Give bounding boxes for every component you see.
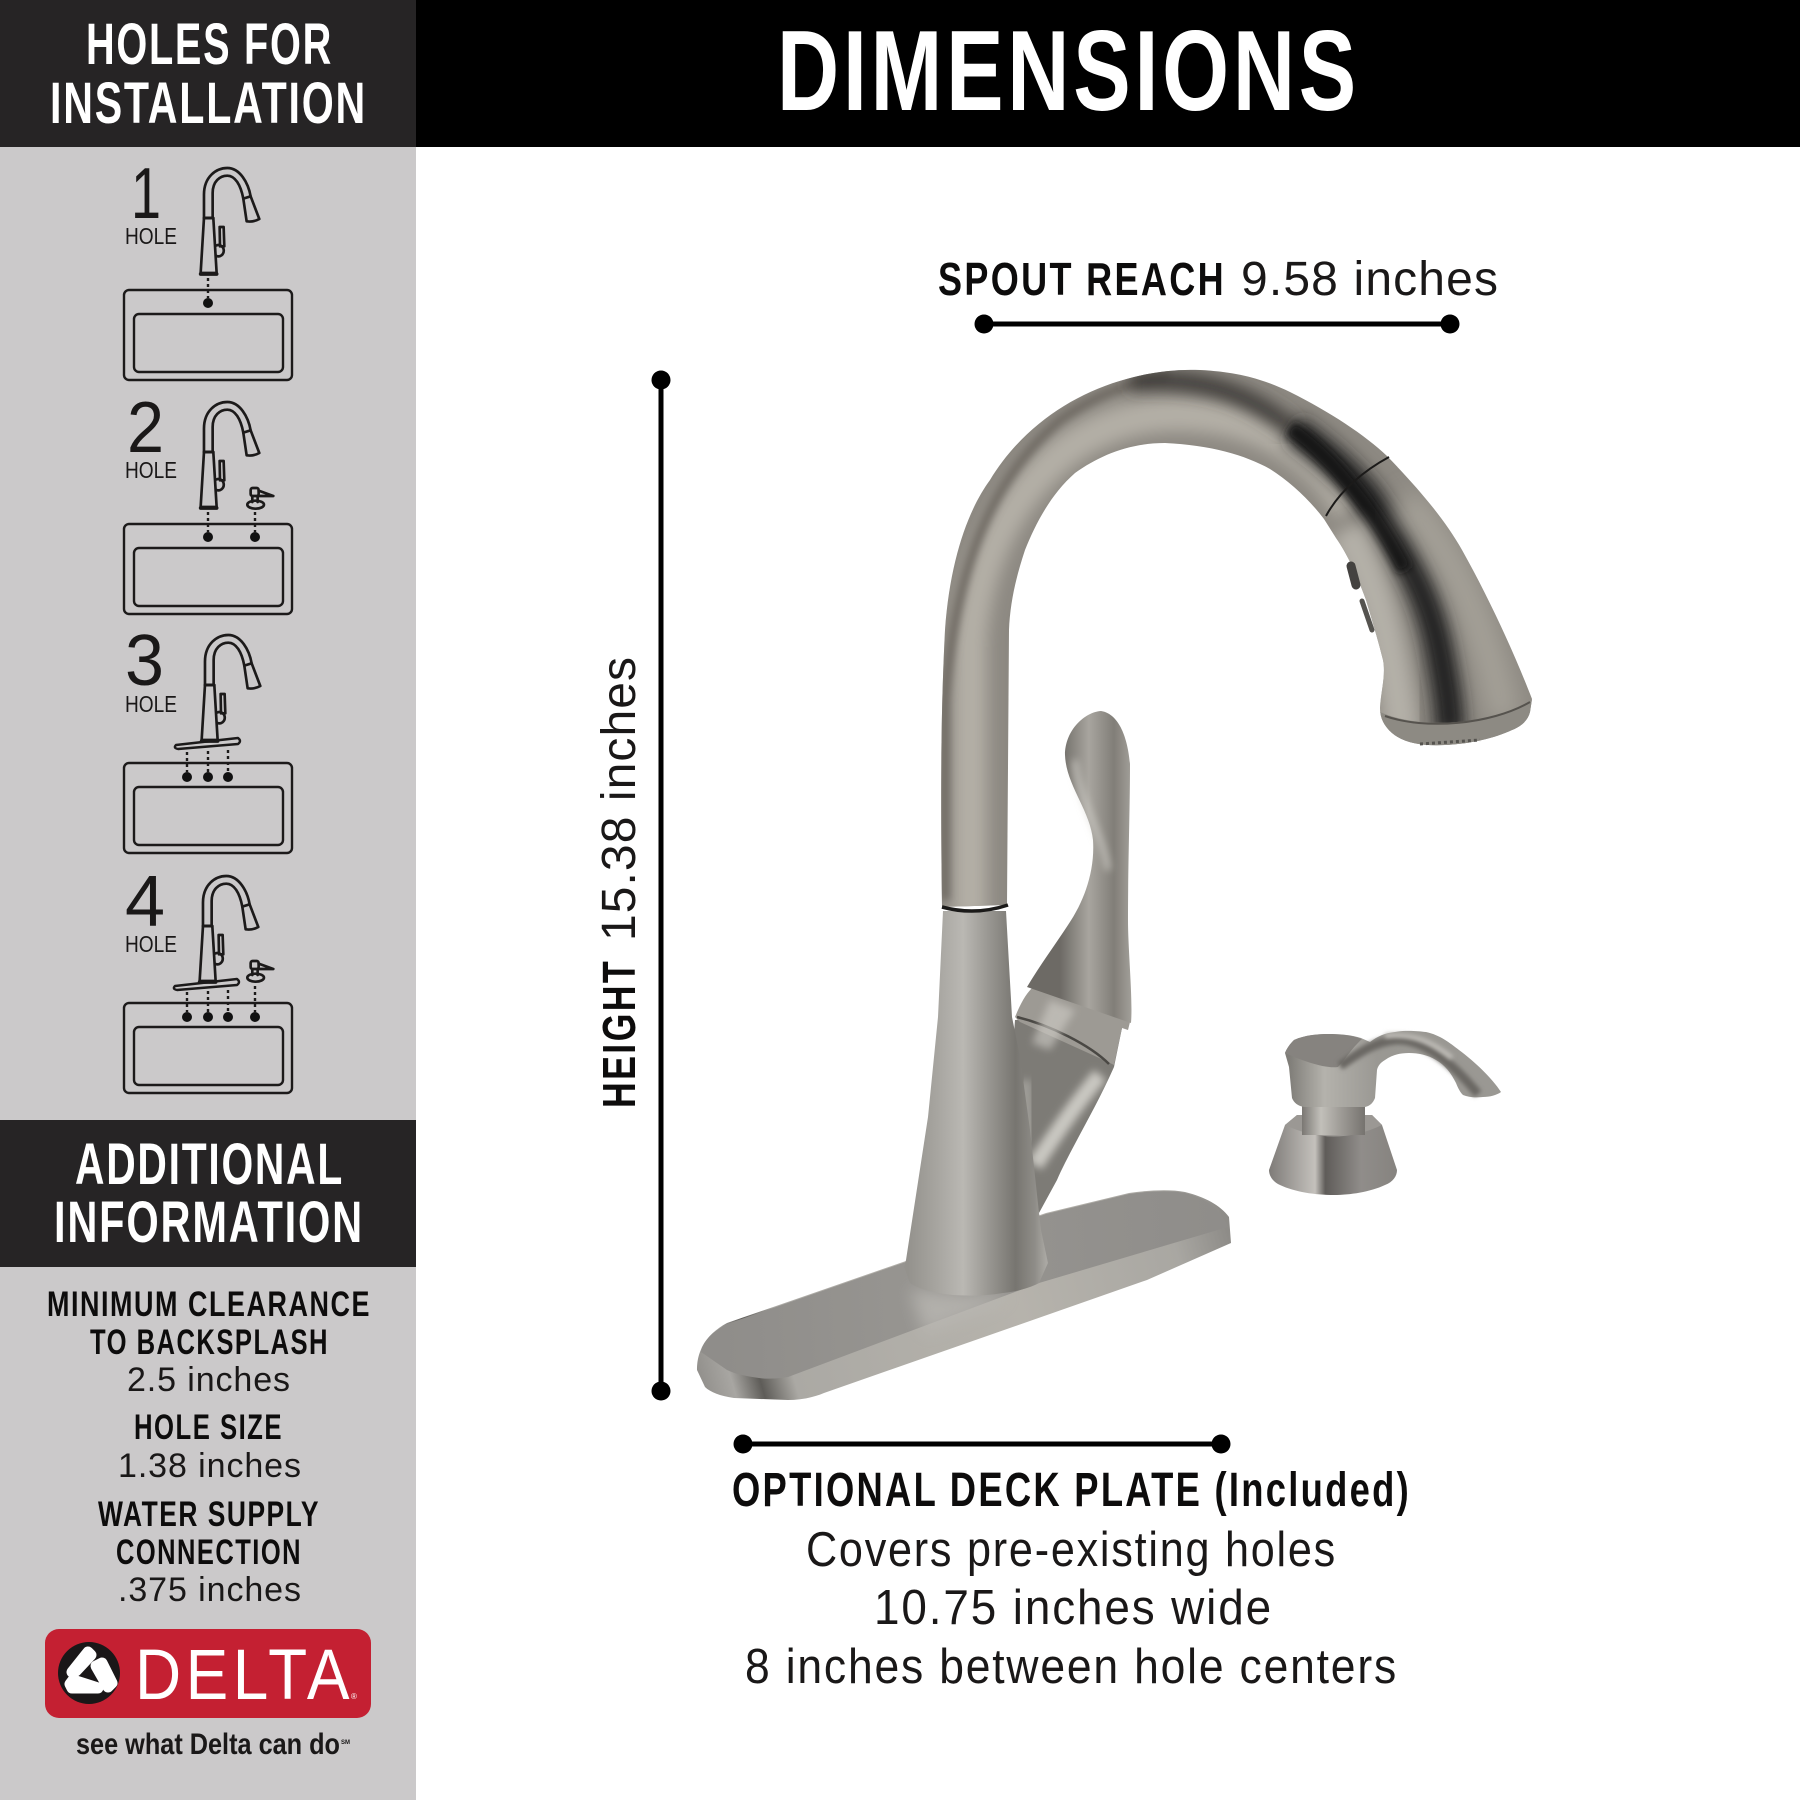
tagline: SM bbox=[341, 1740, 350, 1746]
install option: 1 hole bbox=[124, 154, 292, 380]
dimension: deck plate: 8 inches between hole centers bbox=[745, 1640, 1398, 1694]
deck plate image bbox=[697, 1190, 1231, 1400]
panel heading: holes for installation bbox=[0, 0, 416, 147]
panel heading: holes for installation: HOLES FOR bbox=[86, 12, 333, 77]
panel: left sidebar background bbox=[0, 0, 416, 1800]
spec: minimum clearance: MINIMUM CLEARANCE bbox=[47, 1285, 371, 1324]
spout with pull-down head bbox=[930, 360, 1550, 920]
install option: 3 hole: HOLE bbox=[125, 691, 177, 717]
panel heading: additional information: ADDITIONAL bbox=[75, 1132, 344, 1197]
spec: water supply connection: .375 inches bbox=[118, 1571, 301, 1609]
logo: Delta bbox=[45, 1629, 371, 1718]
dimension: deck plate: 10.75 inches wide bbox=[874, 1581, 1273, 1635]
spec: minimum clearance: 2.5 inches bbox=[127, 1361, 290, 1399]
dimension: spout reach: SPOUT REACH bbox=[938, 253, 1226, 305]
title banner bbox=[416, 0, 1800, 147]
dimension: deck plate bbox=[732, 1434, 1411, 1694]
faucet arm and neck bbox=[1014, 1020, 1122, 1216]
dimension: height bbox=[593, 370, 670, 1400]
install option: 3 hole: 3 bbox=[125, 621, 164, 701]
install option: 2 hole: 2 bbox=[127, 388, 164, 468]
install option: 3 hole bbox=[124, 621, 292, 853]
spec: hole size: 1.38 inches bbox=[118, 1447, 301, 1485]
install option: 4 hole bbox=[124, 862, 292, 1093]
soap dispenser image bbox=[1269, 1031, 1501, 1195]
lever handle bbox=[1027, 711, 1131, 1023]
panel heading: additional information bbox=[0, 1120, 416, 1267]
title: DIMENSIONS bbox=[777, 8, 1360, 135]
spout seams and spray detail bbox=[942, 457, 1480, 911]
dimension: height: HEIGHT bbox=[593, 959, 645, 1108]
dimension: deck plate: OPTIONAL DECK PLATE (Included) bbox=[732, 1464, 1411, 1517]
panel heading: holes for installation: INSTALLATION bbox=[50, 71, 367, 136]
dimension: height: 15.38 inches bbox=[593, 657, 646, 941]
install option: 4 hole: HOLE bbox=[125, 931, 177, 957]
faucet image bbox=[904, 360, 1550, 1296]
dimension: spout reach: 9.58 inches bbox=[1241, 253, 1498, 306]
spec: hole size bbox=[118, 1408, 301, 1485]
spec: minimum clearance: TO BACKSPLASH bbox=[90, 1323, 329, 1362]
handle collar bbox=[1015, 988, 1130, 1065]
logo: Delta: ® bbox=[351, 1692, 357, 1701]
install option: 2 hole bbox=[124, 388, 292, 614]
tagline: see what Delta can do bbox=[76, 1728, 340, 1761]
spec: water supply connection: WATER SUPPLY bbox=[98, 1495, 320, 1534]
spec: water supply connection: CONNECTION bbox=[116, 1533, 302, 1572]
panel heading: additional information: INFORMATION bbox=[54, 1190, 364, 1255]
spec: water supply connection bbox=[98, 1495, 320, 1609]
install option: 2 hole: HOLE bbox=[125, 457, 177, 483]
spec: minimum clearance bbox=[47, 1285, 371, 1399]
dimension: deck plate: Covers pre-existing holes bbox=[806, 1523, 1337, 1577]
dimension: spout reach bbox=[938, 253, 1498, 334]
faucet base stem bbox=[904, 911, 1048, 1296]
install option: 4 hole: 4 bbox=[125, 862, 165, 942]
spec: hole size: HOLE SIZE bbox=[134, 1408, 283, 1447]
logo: Delta: DELTA bbox=[135, 1636, 354, 1715]
install option: 1 hole: 1 bbox=[131, 154, 161, 234]
install option: 1 hole: HOLE bbox=[125, 223, 177, 249]
